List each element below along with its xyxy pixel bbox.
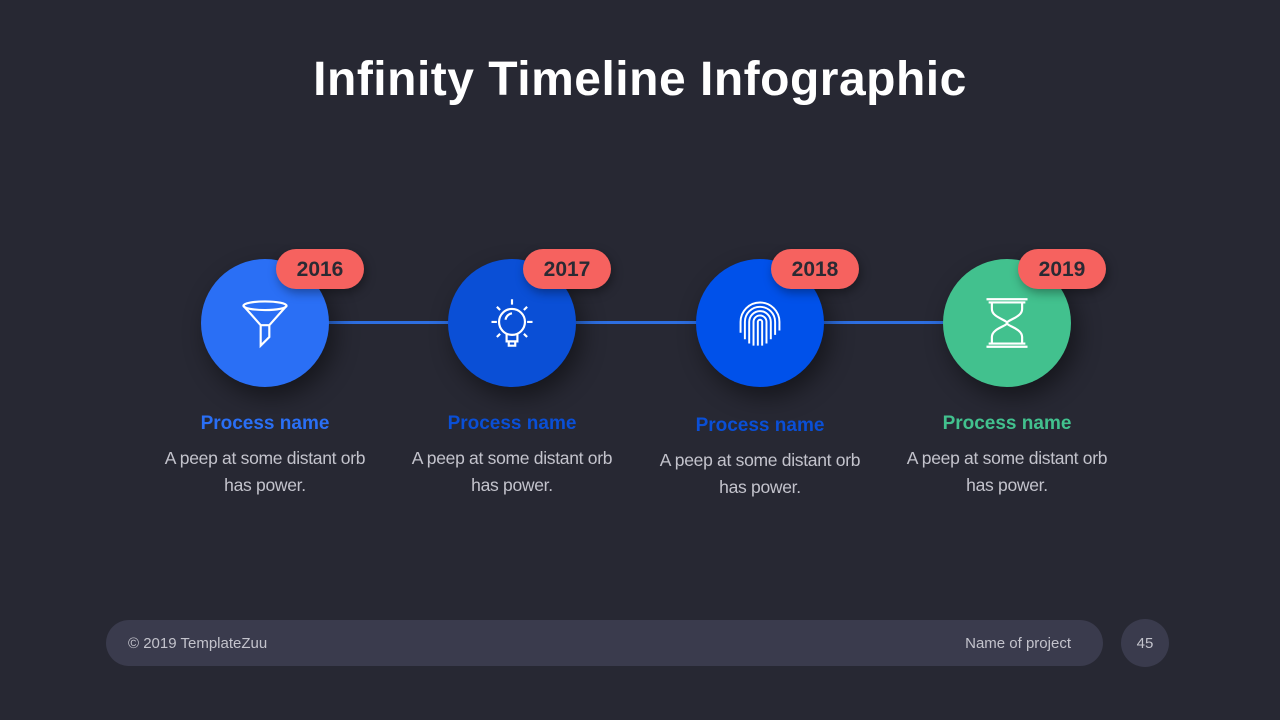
description: has power.	[471, 475, 553, 495]
badge	[771, 249, 859, 289]
heading: Process name	[696, 415, 824, 436]
page number: 45	[1137, 635, 1153, 652]
badge	[276, 249, 364, 289]
step: 2017	[412, 249, 613, 495]
circle: bulb	[448, 259, 576, 387]
description	[906, 448, 1107, 495]
connector line	[300, 321, 980, 324]
title: Infinity Timeline Infographic	[313, 53, 967, 106]
step: 2019	[906, 249, 1108, 495]
heading: Process name	[201, 413, 329, 434]
step: 2018	[660, 249, 861, 497]
badge: 2016	[297, 258, 343, 281]
step: 2016	[164, 249, 366, 495]
description: has power.	[224, 475, 306, 495]
badge: 2017	[544, 258, 590, 281]
badge	[1018, 249, 1106, 289]
page number	[1121, 619, 1169, 667]
circle: hourglass	[943, 259, 1071, 387]
project name: Name of project	[965, 635, 1071, 652]
copyright: © 2019 TemplateZuu	[128, 635, 267, 652]
description: A peep at some distant orb	[660, 450, 860, 470]
description: has power.	[966, 475, 1048, 495]
badge	[523, 249, 611, 289]
description: A peep at some distant orb	[907, 448, 1107, 468]
description	[412, 448, 612, 495]
description: has power.	[719, 477, 801, 497]
description: A peep at some distant orb	[412, 448, 612, 468]
description	[164, 448, 365, 495]
badge: 2018	[792, 258, 838, 281]
circle: funnel	[201, 259, 329, 387]
description: A peep at some distant orb	[165, 448, 365, 468]
description	[660, 450, 860, 497]
circle: fingerprint	[696, 259, 824, 387]
heading: Process name	[448, 413, 576, 434]
heading: Process name	[943, 413, 1071, 434]
footer bar	[106, 620, 1103, 666]
badge: 2019	[1039, 258, 1085, 281]
